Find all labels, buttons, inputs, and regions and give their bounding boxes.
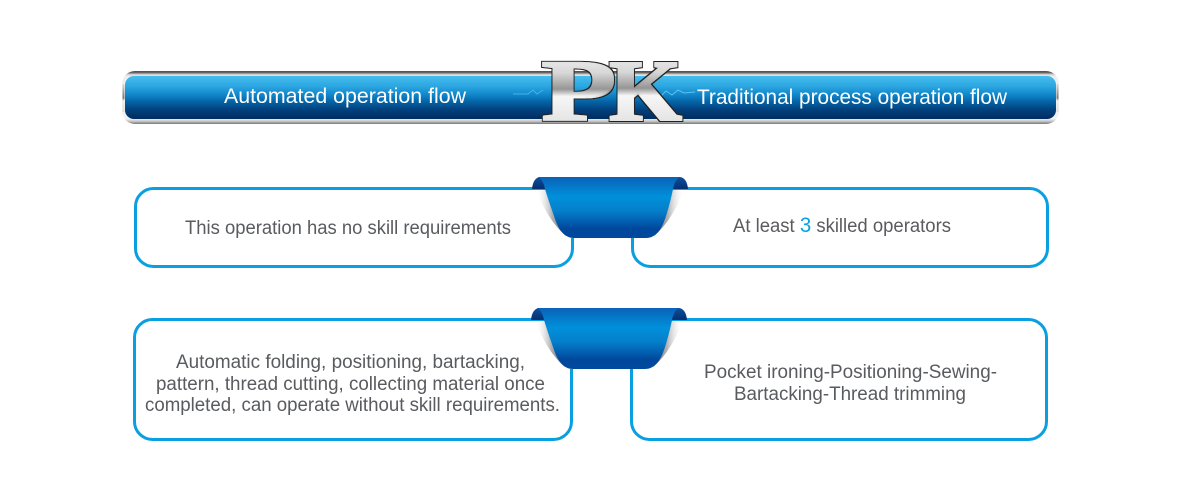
- bar right chrome edge: [1056, 84, 1058, 112]
- PK emblem: [541, 42, 682, 140]
- text: no skill: This operation has no skill requirements: [185, 218, 511, 239]
- pulse line right: [654, 90, 695, 97]
- comparison row 2: [134, 308, 1046, 440]
- ribbon 1: [532, 177, 688, 238]
- comparison row 1: [136, 177, 1048, 266]
- text: traditional description: Pocket ironing-Positioning-Sewing-: [704, 362, 997, 383]
- panel: traditional process: [632, 320, 1046, 440]
- panel: automated process: [134, 320, 572, 440]
- text: traditional description: [704, 362, 997, 405]
- text: traditional description: Bartacking-Thread trimming: [734, 384, 966, 405]
- bar chrome rim: [122, 71, 1059, 124]
- bar left chrome edge: [122, 84, 124, 112]
- heading: automated: Automated operation flow: [224, 85, 467, 108]
- heading: traditional: Traditional process operation flow: [697, 86, 1008, 109]
- text: skilled operators: At least 3 skilled operators: [733, 214, 951, 237]
- text: automated description: completed, can operate without skill requirements.: [145, 395, 560, 416]
- text: automated description: Automatic folding, positioning, bartacking,: [176, 352, 525, 373]
- text: automated description: pattern, thread cutting, collecting material once: [156, 374, 545, 395]
- header bar: [122, 71, 1059, 124]
- letter P: P: [541, 43, 616, 140]
- letter K: K: [609, 42, 682, 139]
- text: automated description: [145, 352, 560, 416]
- pulse line left: [513, 90, 543, 94]
- panel: automated skill: [136, 188, 572, 266]
- ribbon 2: [531, 308, 687, 369]
- bar blue fill: [125, 76, 1056, 119]
- panel: traditional skill: [632, 188, 1048, 266]
